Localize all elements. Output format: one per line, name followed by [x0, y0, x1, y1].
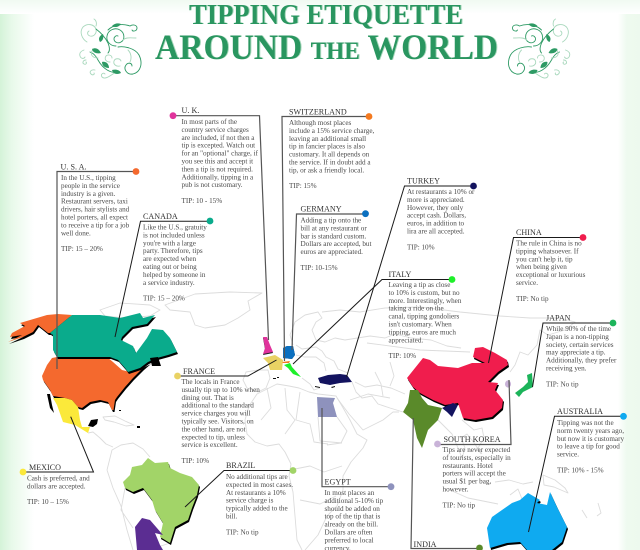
- text block: At restaurants a 10% or: [407, 188, 475, 196]
- text block: already on the bill.: [324, 521, 378, 529]
- text block: a service industry.: [143, 279, 195, 287]
- text block: to receive a tip for a job: [61, 221, 130, 229]
- leader line: [438, 380, 511, 444]
- text block: expected to tip, unless: [182, 433, 245, 441]
- text block: TIP: 10%: [182, 457, 209, 465]
- leader line: [293, 280, 452, 364]
- country: Bhutan: [442, 403, 458, 417]
- text block: At restaurants a 10%: [226, 489, 286, 497]
- text block: party. Therefore, tips: [143, 247, 203, 255]
- text block: dollars are accepted.: [27, 482, 86, 490]
- icon: right floral ornament: [508, 19, 570, 78]
- country: Italy: [284, 363, 301, 377]
- heading: TURKEY: [407, 176, 440, 186]
- text block: bill at any restaurant or: [300, 224, 367, 232]
- text block: typically added to the: [226, 505, 288, 513]
- heading: EGYPT: [324, 478, 351, 486]
- leader line: [292, 214, 366, 350]
- text block: service is excellent.: [182, 441, 238, 449]
- dot: [449, 276, 455, 283]
- text block: TIP: No tip: [442, 501, 475, 509]
- heading: U. K.: [182, 106, 199, 115]
- text block: TIP: 15 – 20%: [143, 295, 185, 303]
- text block: Dollars are accepted, but: [300, 240, 371, 248]
- text block: tip is excepted. Watch out: [182, 142, 255, 150]
- text block: service.: [557, 451, 579, 459]
- text block: then a tip is not required.: [182, 165, 253, 173]
- text block: industry is a given.: [61, 190, 116, 198]
- country: India: [403, 390, 442, 448]
- text block: the other hand, are not: [182, 425, 246, 433]
- text block: tipping whatsoever. If: [516, 247, 579, 255]
- callout: Switzerland: [282, 108, 375, 361]
- country: Turkey: [318, 374, 352, 385]
- text block: hotel porters, all expect: [61, 214, 128, 222]
- text block: lira are all accepted.: [407, 228, 465, 236]
- text block: euros are appreciated.: [300, 248, 363, 256]
- text block: Leaving a tip as close: [388, 281, 450, 289]
- text block: Dollars are often: [324, 528, 373, 536]
- leader line: [528, 416, 624, 532]
- heading: SWITZERLAND: [289, 108, 347, 116]
- text block: more. Interestingly, when: [388, 297, 462, 305]
- callout: Brazil: [185, 461, 296, 536]
- text block: exceptional or luxurious: [516, 271, 586, 279]
- map: black Mediterranean islands: [273, 377, 335, 388]
- text block: eating out or being: [143, 263, 197, 271]
- leader line: [532, 323, 613, 387]
- dot: [133, 168, 139, 175]
- text block: people in the service: [61, 182, 120, 190]
- dot: [610, 320, 616, 326]
- text block: you're with a large: [143, 239, 196, 247]
- callout: Italy: [293, 270, 462, 364]
- callout: India: [411, 418, 483, 550]
- text block: isn't customary. When: [388, 320, 452, 328]
- text block: taking a ride on the: [388, 305, 444, 313]
- country: UK: [263, 337, 273, 354]
- text block: Restaurant servers, taxi: [61, 198, 128, 206]
- callout: Canada: [115, 212, 213, 337]
- heading: JAPAN: [546, 314, 571, 322]
- leader line: [346, 186, 474, 377]
- heading: MEXICO: [29, 463, 61, 472]
- text block: TIP: 10-15%: [300, 264, 338, 272]
- country: Egypt: [317, 397, 337, 417]
- text block: are included, if not then a: [182, 134, 255, 142]
- heading: BRAZIL: [226, 461, 255, 470]
- dot: [580, 234, 586, 241]
- map: grey world outlines: [88, 292, 601, 550]
- country: Argentina: [135, 518, 163, 550]
- text block: TIP: 10%: [388, 352, 416, 360]
- text block: TIP: 10 - 15%: [182, 197, 222, 205]
- heading: CHINA: [516, 228, 542, 237]
- country: China: [407, 347, 508, 420]
- text block: the service. If in doubt add a: [289, 158, 371, 166]
- heading: ITALY: [388, 270, 412, 279]
- text block: tip in fancier places is also: [289, 143, 365, 151]
- text block: Japan is a non-tipping: [546, 333, 609, 341]
- country: South Korea: [505, 380, 511, 388]
- text block: society, certain services: [546, 341, 614, 349]
- dot: [362, 210, 369, 217]
- text block: bar is standard custom.: [300, 232, 367, 240]
- text block: bill.: [226, 512, 238, 520]
- text block: porters will accept the: [442, 470, 506, 478]
- text block: TIP: 10% - 15%: [557, 466, 604, 474]
- text block: expected in most cases.: [226, 481, 293, 489]
- text block: when being given: [516, 263, 567, 271]
- text block: more is appreciated.: [407, 196, 465, 204]
- heading: INDIA: [414, 540, 437, 549]
- callout: Germany: [292, 204, 371, 350]
- text block: top of the tip that is: [324, 513, 380, 521]
- text block: service charges you will: [182, 410, 251, 418]
- text block: drivers, hair stylists and: [61, 206, 130, 214]
- dot: [366, 113, 372, 120]
- dot: [290, 467, 296, 474]
- callout: China: [488, 228, 586, 363]
- text block: is not included unless: [143, 231, 205, 239]
- text block: of tourists, especially in: [442, 454, 511, 462]
- text block: customary. It all depends on: [289, 151, 370, 159]
- callout: Australia: [528, 407, 627, 532]
- heading: GERMANY: [300, 204, 342, 214]
- text block: In most parts of the: [182, 118, 237, 126]
- text block: usual $1 per bag,: [442, 478, 491, 486]
- text block: Cash is preferred, and: [27, 474, 90, 482]
- country: USA: [8, 314, 150, 410]
- leader line: [282, 116, 369, 361]
- text block: TIP: 10 – 15%: [27, 498, 69, 506]
- dot: [170, 112, 176, 119]
- text block: for an "optional" charge, if: [182, 150, 259, 158]
- country: Brazil: [123, 458, 199, 543]
- text block: usually tip up to 10% when: [182, 386, 260, 394]
- leader line: [173, 116, 268, 340]
- text block: dining out. That is: [182, 394, 234, 402]
- leader line: [57, 172, 136, 369]
- dot: [434, 441, 441, 447]
- text block: should be added on: [324, 505, 380, 513]
- text block: tip, or ask a friendly local.: [289, 166, 364, 174]
- callout: France: [174, 360, 276, 465]
- heading: CANADA: [143, 212, 178, 221]
- text block: The locals in France: [182, 378, 240, 386]
- text block: canal, tipping gondoliers: [388, 313, 460, 321]
- text block: TIP: 10%: [407, 243, 435, 251]
- dot: [476, 545, 483, 550]
- heading: FRANCE: [183, 367, 215, 376]
- text block: euros, in addition to: [407, 220, 465, 228]
- map: black shadow islands: [47, 357, 161, 428]
- text block: TIP: 15 – 20%: [61, 245, 103, 253]
- text block: include a 15% service charge,: [289, 127, 375, 135]
- text block: pub is not customary.: [182, 181, 243, 189]
- text block: additional 5-10% tip: [324, 497, 384, 505]
- heading: SOUTH KOREA: [444, 435, 501, 444]
- dot: [20, 469, 26, 475]
- text block: TIP: 15%: [289, 182, 317, 190]
- heading: AUSTRALIA: [557, 407, 603, 416]
- leader line: [115, 221, 210, 337]
- text block: to leave a tip for good: [557, 443, 620, 451]
- country: Canada: [50, 313, 177, 372]
- text block: TIP: No tip: [516, 295, 549, 303]
- callout: South Korea: [434, 380, 511, 509]
- text block: Additionally, tipping in a: [182, 173, 254, 181]
- title: [155, 0, 498, 67]
- leader line: [23, 417, 94, 472]
- text block: accept cash. Dollars,: [407, 212, 466, 220]
- text block: you see this and accept it: [182, 158, 253, 166]
- icon: left floral ornament: [80, 19, 141, 78]
- country: Germany: [283, 346, 295, 359]
- text block: norm twenty years ago,: [557, 427, 624, 435]
- text block: However, they only: [407, 204, 464, 212]
- text block: to 10% is custom, but no: [388, 289, 460, 297]
- leader line: [488, 238, 583, 363]
- callout: Egypt: [322, 408, 394, 550]
- text block: Additionally, they prefer: [546, 357, 617, 365]
- text block: In the U.S., tipping: [61, 174, 116, 182]
- text block: Tips are never expected: [442, 446, 511, 454]
- text block: preferred to local: [324, 536, 374, 544]
- text block: country service charges: [182, 126, 249, 134]
- country: Japan: [515, 373, 533, 397]
- text block: No additional tips are: [226, 473, 288, 481]
- heading: U. S. A.: [60, 162, 87, 172]
- dot: [470, 183, 477, 189]
- text block: additional to the standard: [182, 402, 254, 410]
- text block: receiving yen.: [546, 364, 587, 372]
- text block: appreciated.: [388, 336, 423, 344]
- text block: well done.: [61, 229, 91, 237]
- text block: The rule in China is no: [516, 240, 582, 248]
- callout: Japan: [532, 314, 617, 388]
- text block: you can't help it, tip: [516, 255, 573, 263]
- text block: typically see. Visitors, on: [182, 418, 254, 426]
- callout: UK: [170, 106, 268, 340]
- callout: USA: [57, 162, 139, 369]
- dot: [207, 218, 213, 224]
- text block: restaurants. Hotel: [442, 462, 493, 470]
- title: AROUND THE WORLD: [155, 27, 498, 67]
- text block: Tipping was not the: [557, 419, 614, 427]
- text block: TIP: No tip: [546, 380, 579, 388]
- text block: are expected when: [143, 255, 197, 263]
- text block: helped by someone in: [143, 271, 206, 279]
- text block: Like the U.S., gratuity: [143, 224, 207, 232]
- text block: service charge is: [226, 497, 274, 505]
- text block: TIP: No tip: [226, 528, 259, 536]
- callout: Turkey: [346, 176, 477, 377]
- callout: Mexico: [20, 417, 94, 506]
- country: Australia: [487, 492, 567, 550]
- text block: however.: [442, 486, 469, 494]
- text block: but now it is customary: [557, 435, 624, 443]
- leader line: [178, 360, 276, 376]
- text block: leaving an additional small: [289, 135, 366, 143]
- text block: While 90% of the time: [546, 325, 611, 333]
- country: Mexico: [53, 398, 90, 433]
- text block: service.: [516, 279, 538, 287]
- text block: Although most places: [289, 119, 351, 127]
- country: Switzerland: [282, 361, 290, 363]
- leader line: [322, 408, 391, 487]
- text block: Adding a tip onto the: [300, 216, 361, 224]
- leader line: [411, 418, 480, 548]
- country: France: [263, 355, 283, 370]
- dot: [388, 483, 394, 490]
- map: highlighted countries: [8, 313, 567, 550]
- leader line: [185, 470, 293, 507]
- dot: [620, 413, 627, 420]
- text block: In most places an: [324, 489, 375, 497]
- dot: [174, 373, 181, 379]
- text block: tipping, euros are much: [388, 328, 456, 336]
- text block: may appreciate a tip.: [546, 349, 606, 357]
